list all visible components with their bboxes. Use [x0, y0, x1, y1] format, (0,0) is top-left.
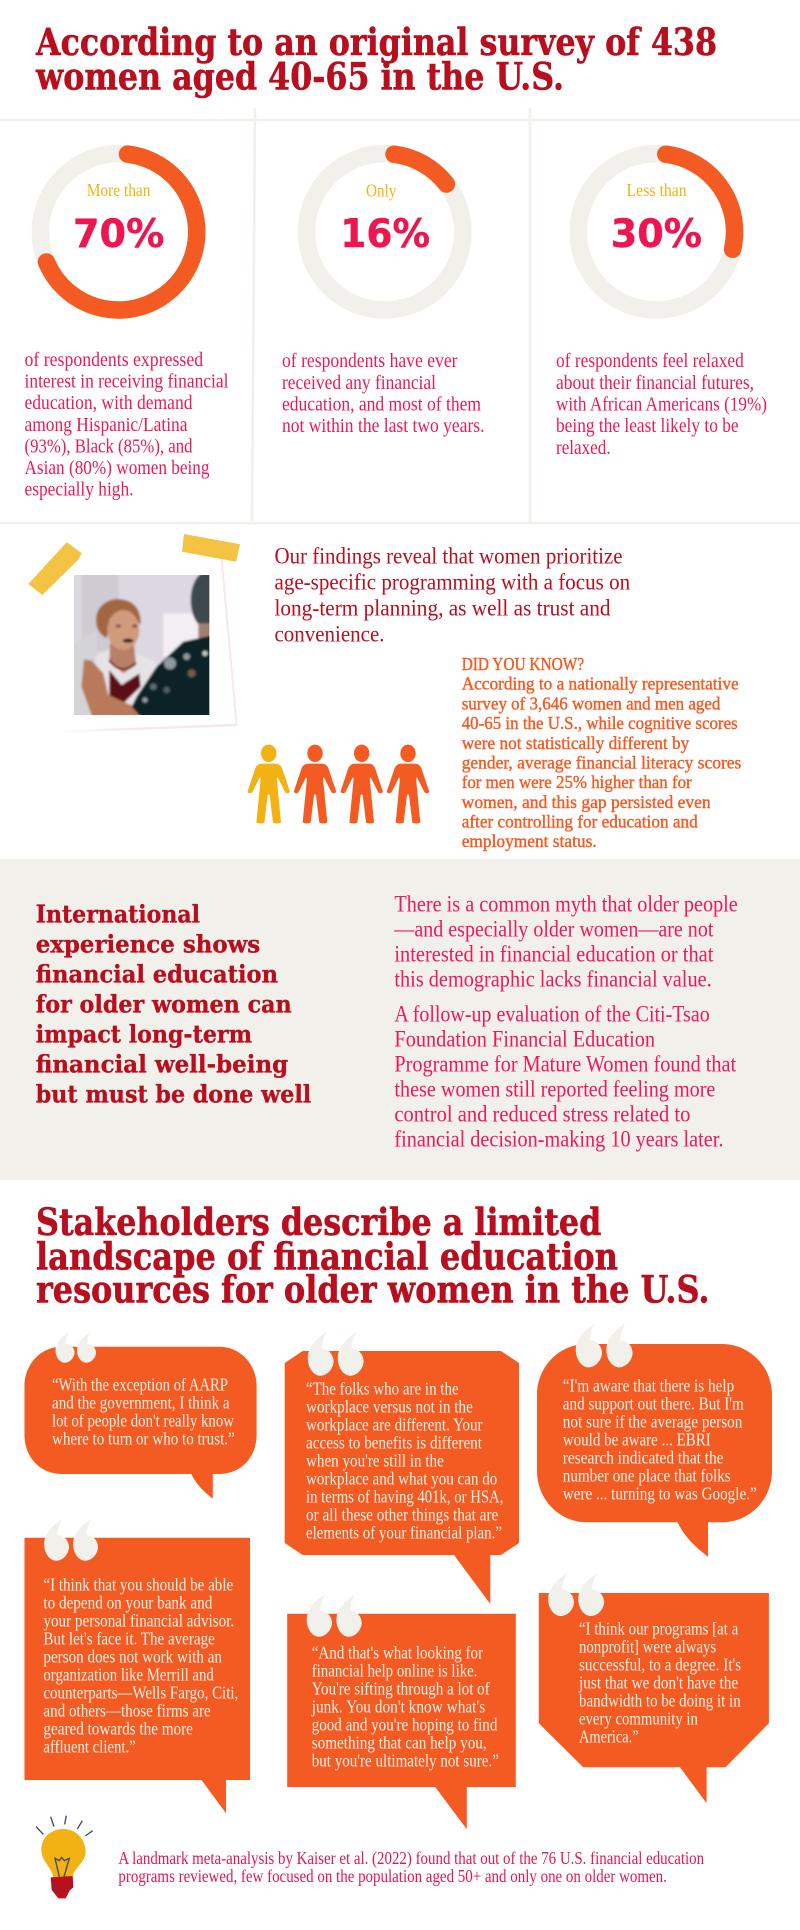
quote text: [563, 1375, 757, 1503]
quote bubble: online help: [287, 1594, 516, 1829]
quote text: workplace versus not in the: [306, 1396, 473, 1416]
heading: international experience: International: [36, 900, 200, 929]
donut: 30 percent: [578, 154, 735, 310]
quote text: “With the exception of AARP: [52, 1374, 228, 1394]
heading: international experience: impact long-term: [36, 1020, 252, 1049]
callout: did you know: after controlling for education and: [462, 812, 698, 832]
callout: did you know: [462, 654, 741, 851]
heading: stakeholders: resources for older women in the U.S.: [36, 1268, 710, 1312]
quote bubble: AARP: [24, 1332, 257, 1499]
callout: did you know: gender, average financial literacy scores: [462, 752, 741, 772]
callout: did you know: 40-65 in the U.S., while cognitive scores: [462, 713, 738, 733]
heading: international experience: but must be done well: [36, 1080, 311, 1109]
panel: international experience: [0, 859, 800, 1180]
quote text: where to turn or who to trust.”: [52, 1428, 235, 1448]
photo: older woman in conversation: [74, 575, 210, 715]
text: common myth: this demographic lacks financial value.: [394, 967, 712, 992]
quote text: access to benefits is different: [306, 1432, 482, 1452]
panel: 16 percent stat: [282, 154, 484, 437]
quote bubble: nonprofit: [539, 1573, 769, 1803]
text: 30 percent description: of respondents feel relaxed: [556, 350, 744, 372]
text: findings: convenience.: [274, 622, 384, 648]
quote text: You're sifting through a lot of: [312, 1678, 490, 1698]
title: [35, 20, 717, 98]
text: common myth: interested in financial education or that: [394, 942, 714, 967]
donut: 16 percent: [306, 154, 463, 310]
text: Kaiser meta-analysis footnote: A landmark meta-analysis by Kaiser et al. (2022) found that out of the 76 U.S. financial education: [118, 1848, 704, 1868]
text: Kaiser meta-analysis footnote: [118, 1848, 704, 1886]
photo card with tape: [28, 534, 240, 732]
quote text: “The folks who are in the: [306, 1378, 459, 1398]
quote text: “I think that you should be able: [43, 1574, 233, 1594]
quote text: organization like Merrill and: [43, 1664, 214, 1684]
quote bubble: workplace: [285, 1332, 519, 1604]
icon: quote mark: [576, 1323, 633, 1367]
text: 30 percent description: relaxed.: [556, 437, 611, 459]
icon: quote mark: [308, 1332, 364, 1376]
quote text: research indicated that the: [563, 1447, 724, 1467]
number: 30%: 30%: [611, 211, 702, 257]
panel: 30 percent stat: [556, 154, 767, 459]
quote text: but you're ultimately not sure.”: [312, 1750, 499, 1770]
quote text: and the government, I think a: [52, 1392, 230, 1412]
text: follow-up evaluation: [394, 1002, 737, 1152]
heading: international experience: financial education: [36, 960, 278, 989]
quote text: nonprofit] were always: [579, 1637, 716, 1657]
quote text: workplace are different. Your: [306, 1414, 483, 1434]
text: 70 percent description: especially high.: [24, 479, 134, 501]
heading: international experience: [36, 900, 311, 1109]
text: follow-up evaluation: control and reduced stress related to: [394, 1102, 690, 1127]
label: less than: Less than: [626, 180, 687, 200]
quote text: not sure if the average person: [563, 1411, 743, 1431]
text: common myth: There is a common myth that older people: [394, 892, 738, 917]
quote text: and others—those firms are: [43, 1700, 211, 1720]
text: 70 percent description: (93%), Black (85%), and: [24, 435, 192, 457]
quote text: or all these other things that are: [306, 1504, 498, 1524]
quote text: junk. You don't know what's: [311, 1696, 485, 1716]
quote text: in terms of having 401k, or HSA,: [306, 1486, 503, 1506]
tape: left: [28, 542, 82, 595]
quote text: lot of people don't really know: [52, 1410, 234, 1430]
quote text: successful, to a degree. It's: [579, 1655, 741, 1675]
callout: did you know: were not statistically different by: [462, 733, 689, 753]
text: follow-up evaluation: these women still reported feeling more: [394, 1077, 715, 1102]
quote text: America.”: [579, 1727, 639, 1747]
quote text: person does not work with an: [43, 1646, 222, 1666]
tape: right: [182, 534, 240, 562]
heading: stakeholders: landscape of financial education: [36, 1234, 618, 1278]
quote bubble: bank: [24, 1519, 250, 1813]
quote text: every community in: [579, 1709, 698, 1729]
quote text: would be aware ... EBRI: [563, 1429, 711, 1449]
heading: stakeholders: [36, 1200, 710, 1312]
quote text: were ... turning to was Google.”: [563, 1483, 757, 1503]
heading: stakeholders: Stakeholders describe a limited: [36, 1200, 601, 1244]
quote text: good and you're hoping to find: [312, 1714, 498, 1734]
text: 16 percent description: received any financial: [282, 372, 436, 394]
text: follow-up evaluation: financial decision-making 10 years later.: [394, 1127, 723, 1152]
donut: 70 percent: [40, 154, 197, 310]
quote text: your personal financial advisor.: [43, 1610, 234, 1630]
title: women aged 40-65 in the U.S.: [35, 54, 564, 98]
quote text: financial help online is like.: [312, 1660, 478, 1680]
quote text: to depend on your bank and: [43, 1592, 213, 1612]
quote text: [311, 1642, 499, 1770]
text: 16 percent description: education, and most of them: [282, 394, 481, 416]
quote text: But let's face it. The average: [43, 1628, 215, 1648]
text: 70 percent description: Asian (80%) women being: [24, 457, 210, 479]
text: findings: [274, 544, 630, 648]
icon: quote mark: [44, 1519, 98, 1561]
text: 70 percent description: of respondents expressed: [24, 349, 203, 371]
quote text: “I think our programs [at a: [579, 1619, 738, 1639]
text: 16 percent description: [282, 350, 484, 437]
text: 70 percent description: interest in receiving financial: [24, 371, 229, 393]
quote text: “I'm aware that there is help: [563, 1375, 734, 1395]
callout: did you know: According to a nationally representative: [462, 674, 739, 694]
number: 70%: 70%: [73, 211, 164, 257]
text: findings: age-specific programming with a focus on: [274, 570, 630, 596]
text: 70 percent description: among Hispanic/Latina: [24, 414, 188, 436]
callout: did you know: DID YOU KNOW?: [462, 654, 584, 674]
quote text: and support out there. But I'm: [563, 1393, 744, 1413]
text: findings: Our findings reveal that women prioritize: [274, 544, 622, 570]
text: 30 percent description: about their financial futures,: [556, 372, 754, 394]
text: 16 percent description: of respondents have ever: [282, 350, 458, 372]
text: common myth: —and especially older women—are not: [394, 917, 714, 942]
quote text: [306, 1378, 503, 1542]
number: 16%: 16%: [340, 211, 430, 257]
text: follow-up evaluation: Programme for Mature Women found that: [394, 1052, 737, 1077]
icon: light bulb: [36, 1816, 93, 1898]
text: common myth: [394, 892, 738, 992]
callout: did you know: survey of 3,646 women and men aged: [462, 693, 721, 713]
quote text: number one place that folks: [563, 1465, 731, 1485]
text: 70 percent description: [24, 349, 229, 501]
quote text: counterparts—Wells Fargo, Citi,: [43, 1682, 238, 1702]
text: 30 percent description: [556, 350, 767, 459]
callout: did you know: for men were 25% higher than for: [462, 772, 692, 792]
heading: international experience: financial well-being: [36, 1050, 288, 1079]
quote text: geared towards the more: [43, 1718, 193, 1738]
label: only: Only: [366, 180, 396, 200]
icon: quote mark: [307, 1594, 362, 1637]
label: more than: More than: [87, 180, 150, 200]
heading: international experience: experience shows: [36, 930, 260, 959]
quote text: [578, 1619, 741, 1747]
quote text: [52, 1374, 235, 1448]
quote text: “And that's what looking for: [312, 1642, 483, 1662]
text: 16 percent description: not within the last two years.: [282, 415, 484, 437]
quote text: elements of your financial plan.”: [306, 1522, 502, 1542]
quote bubble: Google: [537, 1323, 772, 1557]
quote text: just that we don't have the: [578, 1673, 738, 1693]
text: follow-up evaluation: Foundation Financial Education: [394, 1027, 656, 1052]
text: findings: long-term planning, as well as trust and: [274, 596, 611, 622]
icon: four people: [247, 745, 429, 823]
heading: international experience: for older women can: [36, 990, 292, 1019]
text: 70 percent description: education, with demand: [24, 392, 192, 414]
text: 30 percent description: being the least likely to be: [556, 415, 739, 437]
callout: did you know: employment status.: [462, 831, 597, 851]
icon: quote mark: [548, 1573, 604, 1616]
quote text: something that can help you,: [312, 1732, 487, 1752]
icon: quote mark: [56, 1332, 96, 1363]
text: follow-up evaluation: A follow-up evaluation of the Citi-Tsao: [394, 1002, 710, 1027]
quote text: affluent client.”: [43, 1736, 136, 1756]
callout: did you know: women, and this gap persisted even: [462, 792, 711, 812]
text: Kaiser meta-analysis footnote: programs reviewed, few focused on the population aged 50+ and only one on older women.: [118, 1866, 667, 1886]
panel: 70 percent stat: [24, 154, 229, 501]
quote text: when you're still in the: [306, 1450, 444, 1470]
quote text: workplace and what you can do: [306, 1468, 498, 1488]
quote text: [43, 1574, 238, 1756]
quote text: bandwidth to be doing it in: [579, 1691, 741, 1711]
